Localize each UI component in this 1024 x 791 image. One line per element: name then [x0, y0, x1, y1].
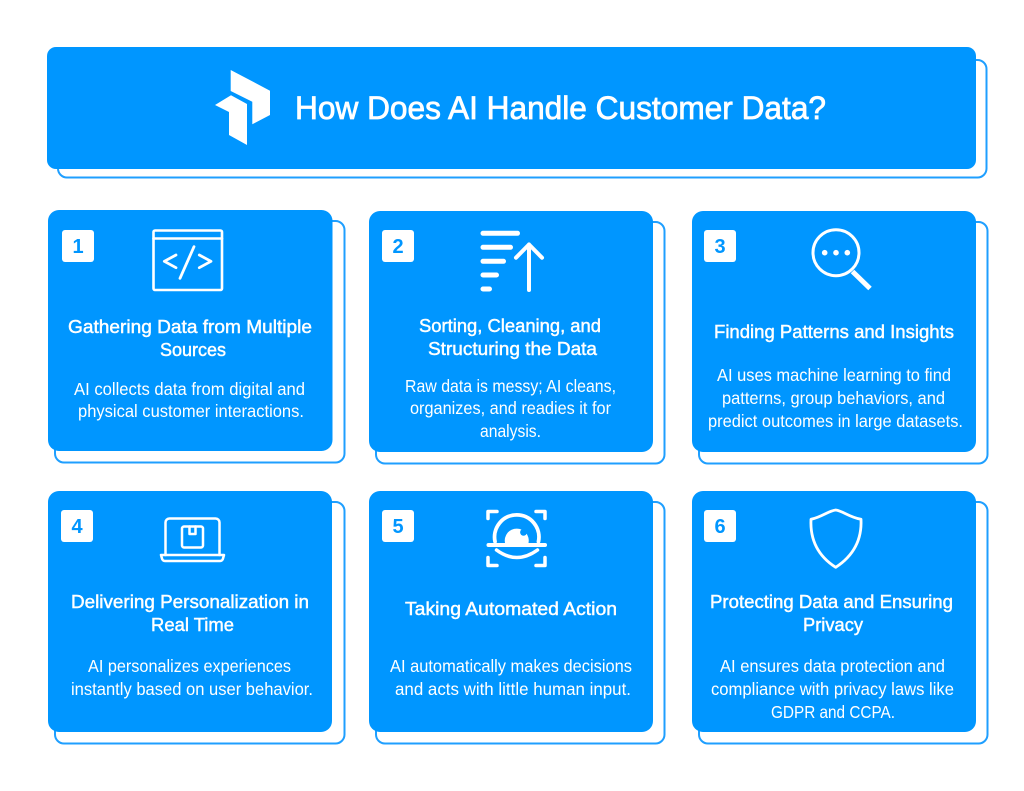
badge: number 4: 4: [71, 516, 83, 538]
description: and acts with little human input.: [395, 679, 631, 699]
description: physical customer interactions.: [78, 401, 304, 421]
heading: Delivering Personalization in: [71, 591, 309, 612]
icon: laptop with package: [161, 518, 224, 561]
badge: number 3: 3: [714, 236, 726, 258]
description: [74, 379, 305, 421]
heading: Protecting Data and Ensuring: [710, 591, 953, 612]
heading: [710, 591, 953, 635]
icon: magnifying glass: [813, 230, 870, 288]
heading: Real Time: [151, 614, 234, 635]
description: compliance with privacy laws like: [711, 679, 954, 699]
panel: step 4 personalization: [48, 491, 344, 744]
panel: header banner: [47, 47, 986, 178]
panel: step 3 finding patterns: [692, 211, 988, 464]
badge: number 5: 5: [392, 516, 404, 538]
badge: number 4: [61, 510, 93, 542]
icon: sorted lines with up arrow: [483, 233, 542, 290]
panel: step 2 sorting and cleaning: [369, 211, 664, 464]
heading: Sorting, Cleaning, and: [419, 315, 601, 336]
badge: number 6: 6: [714, 516, 726, 538]
panel: step 1 gathering data: [48, 210, 344, 462]
heading: Structuring the Data: [428, 338, 598, 359]
description: AI personalizes experiences: [88, 656, 291, 676]
panel: step 6 protecting data: [692, 491, 988, 744]
description: [405, 376, 616, 441]
description: instantly based on user behavior.: [71, 679, 313, 699]
description: patterns, group behaviors, and: [722, 388, 945, 408]
description: [711, 656, 954, 722]
heading: [419, 315, 601, 359]
description: [71, 656, 313, 699]
heading: [71, 591, 309, 635]
icon: code window: [154, 230, 222, 290]
badge: number 2: 2: [392, 236, 404, 258]
description: AI ensures data protection and: [720, 656, 945, 676]
icon: logo: [215, 70, 270, 145]
description: AI automatically makes decisions: [390, 656, 632, 676]
badge: number 2: [382, 230, 414, 262]
heading: Gathering Data from Multiple: [68, 316, 312, 337]
description: organizes, and readies it for: [410, 398, 611, 418]
badge: number 5: [382, 510, 414, 542]
badge: number 6: [704, 510, 736, 542]
heading: Privacy: [803, 614, 864, 635]
heading: [68, 316, 312, 360]
badge: number 1: [62, 230, 94, 262]
description: Raw data is messy; AI cleans,: [405, 376, 616, 396]
description: analysis.: [480, 421, 541, 441]
description: AI uses machine learning to find: [717, 365, 951, 385]
description: AI collects data from digital and: [74, 379, 305, 399]
heading: Sources: [160, 339, 226, 360]
description: predict outcomes in large datasets.: [708, 411, 963, 431]
description: GDPR and CCPA.: [771, 702, 895, 722]
description: [390, 656, 632, 699]
title: How Does AI Handle Customer Data?: [295, 90, 826, 126]
panel: step 5 automated action: [369, 491, 664, 744]
badge: number 1: 1: [72, 236, 84, 258]
description: [708, 365, 963, 431]
badge: number 3: [704, 230, 736, 262]
icon: shield: [811, 510, 861, 567]
heading: Finding Patterns and Insights: [714, 321, 954, 342]
heading: Taking Automated Action: [405, 598, 617, 619]
icon: eye scan: [488, 512, 545, 566]
